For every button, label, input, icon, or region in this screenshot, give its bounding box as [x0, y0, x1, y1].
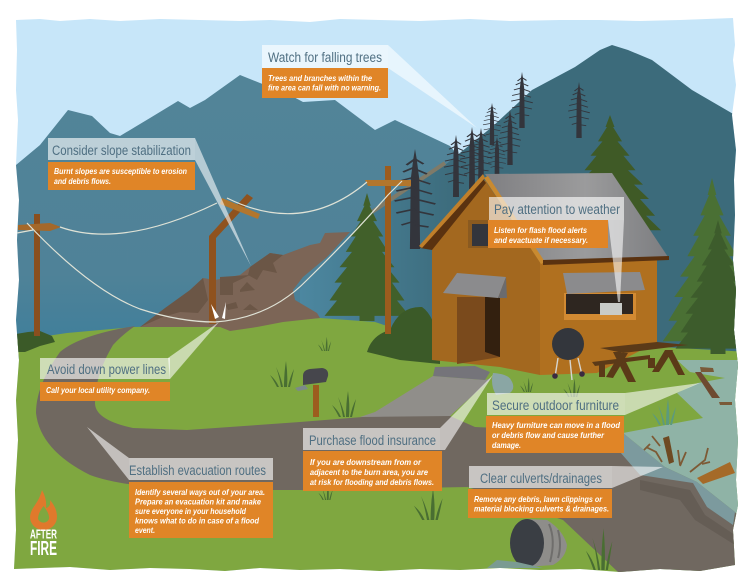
concrete driveway	[360, 376, 492, 417]
callout: secure outdoor furniture: Secure outdoor furniture	[492, 398, 619, 413]
callout: establish evacuation routes: knows what to do in case of a flood	[135, 516, 260, 526]
green ground	[0, 318, 750, 581]
small window	[468, 220, 490, 248]
road	[36, 326, 750, 572]
evergreen tree left of house	[324, 193, 410, 321]
callout: consider slope stabilization	[48, 138, 251, 266]
callout: establish evacuation routes: sure everyone in your household	[135, 506, 247, 516]
grill	[552, 328, 585, 380]
callout: secure outdoor furniture: or debris flow and cause further	[492, 430, 605, 440]
callout: clear culverts and drainages: Clear culverts/drainages	[480, 471, 602, 486]
evergreen trees right	[662, 178, 736, 354]
callout: establish evacuation routes: Identify several ways out of your area.	[135, 487, 265, 497]
pool by the driveway	[492, 373, 513, 395]
bushes	[16, 307, 440, 364]
callout: watch for falling trees: Trees and branches within the	[268, 73, 372, 83]
callout: pay attention to weather: Listen for flash flood alerts	[494, 225, 587, 235]
callout: establish evacuation routes: Prepare an evacuation kit and make	[135, 496, 261, 506]
callout: watch for falling trees: Watch for falling trees	[268, 50, 382, 65]
callout: pay attention to weather: and evactuate if necessary.	[494, 235, 588, 245]
door	[457, 297, 500, 364]
debris: boards, logs, and branches	[644, 367, 735, 484]
water	[624, 360, 738, 514]
callout: secure outdoor furniture: damage.	[492, 440, 521, 450]
mailbox	[295, 368, 328, 417]
callout: purchase flood insurance: Purchase flood insurance	[309, 433, 436, 448]
callout: purchase flood insurance: If you are downstream from or	[310, 457, 422, 467]
tree: evergreen behind house	[584, 115, 661, 230]
callout: pay attention to weather: Pay attention to weather	[494, 202, 620, 217]
callout: consider slope stabilization: and debris flows.	[54, 176, 111, 186]
grass tufts	[270, 337, 676, 570]
gable trim	[484, 176, 545, 264]
ridge band	[372, 163, 445, 212]
callout: establish evacuation routes: event.	[135, 525, 155, 535]
window	[564, 293, 636, 320]
callout: clear culverts and drainages	[468, 466, 663, 518]
front dark mountain	[346, 45, 738, 370]
cabin walls	[432, 180, 540, 375]
logo wordmark second line: FIRE	[30, 538, 57, 560]
burnt trees	[395, 72, 590, 249]
logo: After Fire	[30, 490, 57, 542]
culvert pipe	[487, 519, 567, 568]
callout: clear culverts and drainages: material blocking culverts & drainages.	[474, 504, 609, 514]
power poles and lines	[17, 166, 411, 336]
picnic table	[592, 342, 688, 382]
air conditioner	[600, 303, 622, 315]
callout: watch for falling trees	[262, 45, 477, 128]
callout: establish evacuation routes	[87, 427, 273, 538]
window awning	[563, 272, 645, 294]
callout: clear culverts and drainages: Remove any debris, lawn clippings or	[474, 494, 603, 504]
callout: secure outdoor furniture: Heavy furniture can move in a flood	[492, 420, 621, 430]
callout: avoid down power lines	[40, 322, 219, 401]
callout: pay attention to weather	[488, 197, 624, 302]
cabin eaves	[420, 179, 486, 250]
door awning	[443, 273, 506, 298]
logo wordmark: AFTER	[30, 526, 57, 542]
cabin	[419, 173, 669, 375]
callout: consider slope stabilization: Consider slope stabilization	[52, 143, 191, 158]
cabin roof	[485, 173, 668, 262]
callout: purchase flood insurance	[303, 375, 493, 491]
callout: consider slope stabilization: Burnt slopes are susceptible to erosion	[54, 166, 187, 176]
flooded band along the road edge	[620, 433, 735, 525]
callout: purchase flood insurance: at risk for flooding and debris flows.	[310, 477, 434, 487]
callout: purchase flood insurance: adjacent to the burn area, you are	[310, 467, 428, 477]
callout: avoid down power lines: Call your local utility company.	[46, 385, 150, 395]
callout: secure outdoor furniture	[486, 383, 700, 453]
callout: watch for falling trees: fire area can fall with no warning.	[268, 82, 381, 92]
burnt debris slope	[140, 232, 350, 331]
logo flame	[30, 490, 57, 530]
callout: avoid down power lines: Avoid down power lines	[47, 362, 166, 377]
back mountain range	[10, 75, 470, 360]
callout: establish evacuation routes: Establish evacuation routes	[129, 463, 266, 478]
